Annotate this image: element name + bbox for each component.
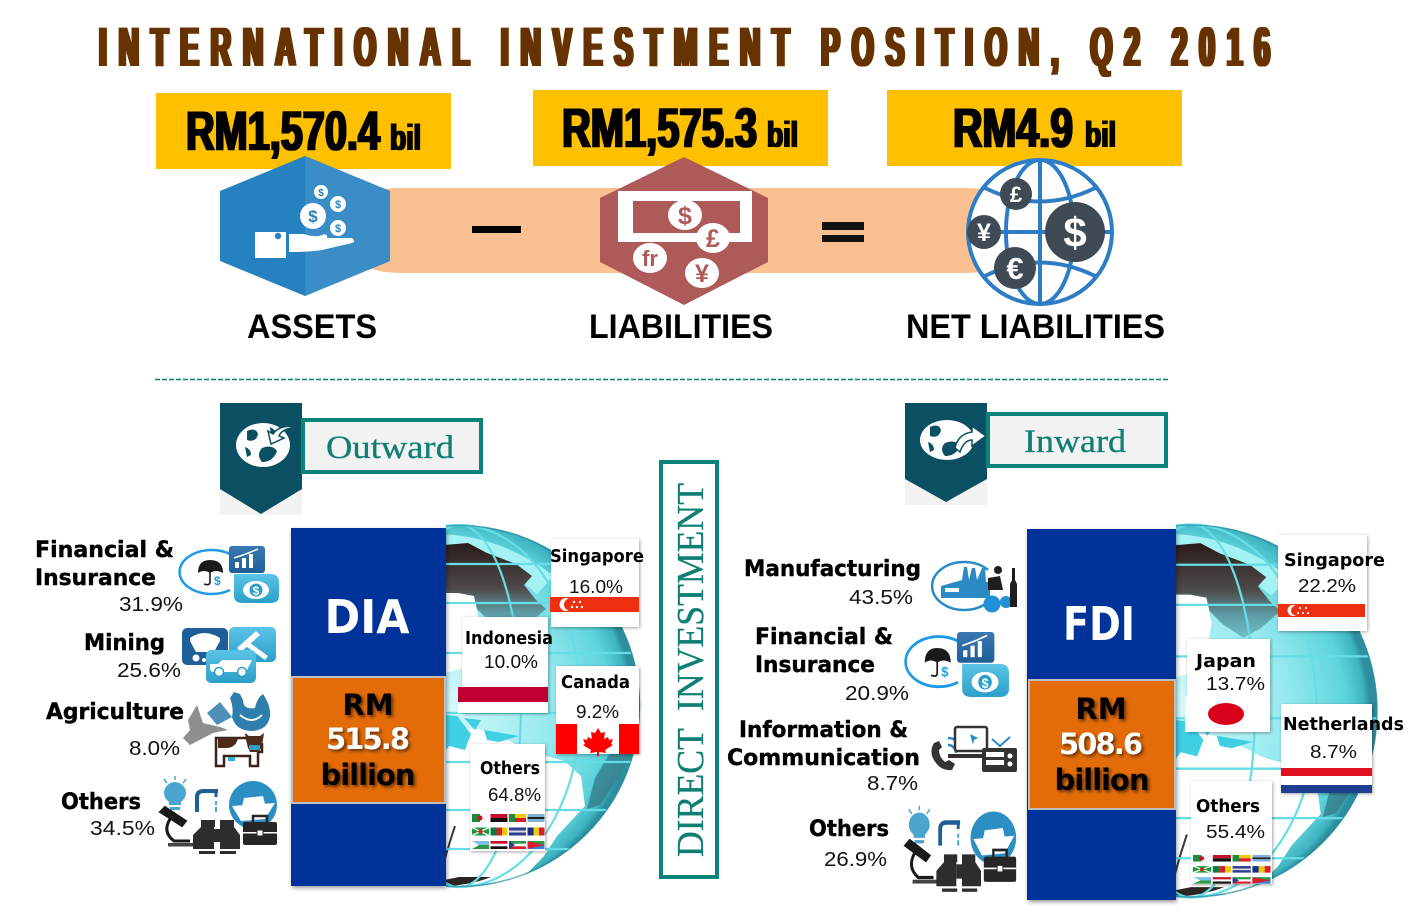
sector: information and communication: Information & [739,718,908,743]
card: Japan: Japan [1194,651,1256,672]
net liabilities value: RM4.9 [953,96,1073,159]
card: Singapore: Singapore [1284,550,1385,571]
sector: financial and insurance: 31.9% [119,594,183,616]
sector: financial and insurance: 20.9% [845,683,909,705]
sector: others [809,806,1016,892]
sector: agriculture [46,692,270,766]
direct investment label: DIRECT INVESTMENT [670,483,712,857]
list: outward sectors [35,538,279,854]
sector: agriculture: 8.0% [129,738,180,760]
panel: outward heading [220,403,481,515]
globe [446,524,640,888]
icon: hand receiving coins: $ [335,223,341,235]
panel: DIA outward [278,525,644,887]
icon: globe with currencies [966,158,1114,306]
net liabilities value box [887,90,1182,166]
sector: others: 34.5% [90,818,155,840]
icon: globe with currencies: $ [1063,209,1087,256]
net liabilities value: bil [1085,114,1116,155]
card: Canada [556,666,639,756]
icon: flag grid [1193,855,1271,884]
icon: hand receiving coins [220,156,390,296]
sector: agriculture: Agriculture [46,700,184,725]
liabilities value box [533,90,828,166]
icon: banknote and coins [600,157,768,305]
card: Singapore [1278,535,1385,631]
card: Netherlands [1281,704,1404,793]
card: Netherlands: 8.7% [1310,742,1357,762]
sector: manufacturing: 43.5% [849,587,913,609]
icon: inward badge [905,403,987,505]
DIA label: DIA [324,590,410,644]
sector: mining [84,627,276,683]
card: Singapore: 22.2% [1298,576,1356,596]
sector: manufacturing [744,557,1017,612]
sector: others: 26.9% [824,849,887,871]
card: Others [470,744,545,851]
card: Japan: 13.7% [1206,674,1265,694]
inward label box [988,414,1166,466]
card: Indonesia: Indonesia [465,628,553,649]
assets value: bil [390,117,421,158]
sector: manufacturing: Manufacturing [744,557,921,582]
FDI value block: billion [1054,763,1150,797]
equals sign [822,222,864,242]
card: Japan [1185,639,1270,732]
FDI value block [1029,680,1175,809]
FDI bar [1027,529,1176,900]
card: Singapore: 16.0% [569,577,623,597]
direct investment box [661,462,717,877]
icon: banknote and coins: $ [678,202,692,230]
sector: financial and insurance: Financial & [35,538,174,563]
panel: inward heading [905,403,1166,505]
card: Indonesia: 10.0% [484,652,538,672]
sector: financial and insurance: Insurance [755,653,875,678]
card: Others: 64.8% [488,785,541,805]
DIA value block: RM [342,688,394,722]
card: Canada: Canada [561,672,630,693]
sector: financial and insurance [35,538,279,616]
FDI label: FDI [1063,597,1135,651]
FDI value block: 508.6 [1059,727,1143,761]
sector: others: Others [61,790,141,815]
card: Others: Others [480,758,540,779]
icon: banknote and coins: ¥ [695,260,709,288]
globe [1176,523,1378,899]
sector: mining: Mining [84,631,165,656]
card: Others [1191,781,1272,884]
card: Netherlands: Netherlands [1283,714,1404,735]
minus sign [472,226,521,233]
icon: globe with currencies: € [1006,251,1024,286]
panel: assets [156,93,451,346]
sector: information and communication [727,718,1017,795]
card: Canada: 9.2% [576,702,619,722]
icon: globe with currencies: ¥ [977,219,991,247]
inward label: Inward [1024,424,1127,460]
assets value: RM1,570.4 [186,99,380,162]
sector: mining: 25.6% [117,660,181,682]
card: Others: Others [1196,796,1260,817]
liabilities value: bil [767,114,798,155]
panel: net liabilities [887,90,1182,346]
FDI value block: RM [1075,692,1127,726]
sector: information and communication: Communication [727,746,920,771]
DIA value block [292,677,445,803]
sector: financial and insurance: Financial & [755,625,893,650]
title: INTERNATIONAL INVESTMENT POSITION, Q2 2016 [99,17,1270,79]
assets value box [156,93,451,169]
icon: hand receiving coins: $ [318,188,324,199]
icon: flag grid [472,814,544,849]
net liabilities label: NET LIABILITIES [906,308,1165,346]
panel: FDI inward [1005,525,1404,900]
list: inward sectors [727,557,1017,892]
DIA value block: 515.8 [326,722,410,756]
icon: globe with currencies: £ [1010,182,1023,207]
outward label box [303,420,481,472]
icon: outward badge [220,403,302,515]
icon: hand receiving coins: $ [335,199,341,211]
outward label: Outward [326,430,455,466]
icon: banknote and coins: £ [706,225,720,253]
sector: others: Others [809,817,889,842]
icon: hand receiving coins: $ [308,207,318,226]
card: Indonesia [458,617,553,713]
card: Others: 55.4% [1206,822,1265,842]
DIA value block: billion [320,758,416,792]
assets label: ASSETS [247,308,377,346]
panel: liabilities [533,90,828,346]
liabilities value: RM1,575.3 [562,96,757,159]
icon: banknote and coins: fr [642,246,658,271]
panel: direct investment [661,462,717,877]
sector: information and communication: 8.7% [867,773,918,795]
liabilities label: LIABILITIES [589,308,773,346]
equation band [360,188,1006,273]
DIA bar [291,528,446,886]
card: Singapore: Singapore [550,546,644,567]
sector: financial and insurance [755,625,1009,705]
sector: financial and insurance: Insurance [35,566,156,591]
sector: others [61,776,277,854]
card: Singapore [550,539,644,627]
